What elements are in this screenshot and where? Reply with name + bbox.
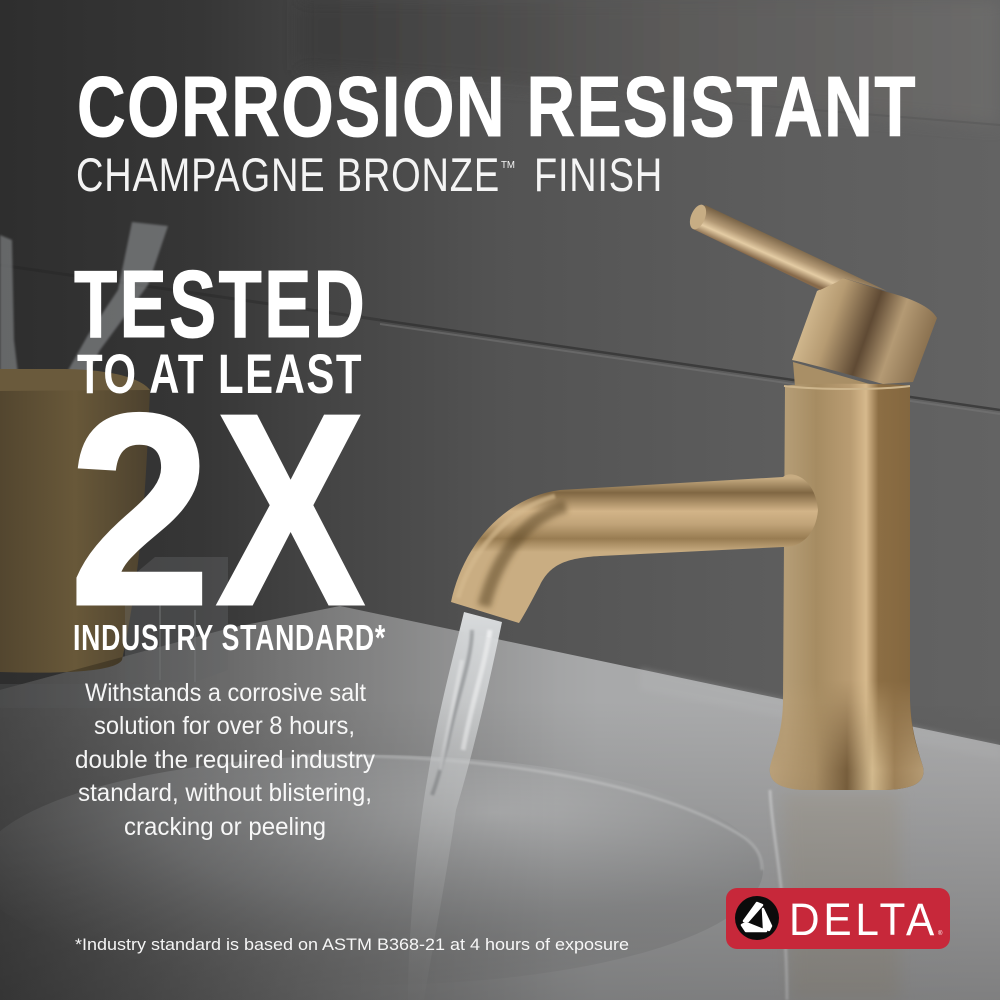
footnote: *Industry standard is based on ASTM B368-21 at 4 hours of exposure xyxy=(75,935,629,954)
cup with toothbrushes xyxy=(0,222,168,673)
spout tip highlight xyxy=(458,496,555,598)
cup rim xyxy=(0,369,150,391)
cup body xyxy=(0,390,150,673)
falling water xyxy=(408,612,502,1000)
icon: delta mark xyxy=(735,896,779,940)
toothbrush: left xyxy=(0,235,20,390)
faucet spout xyxy=(451,474,818,623)
glass cube xyxy=(0,557,228,708)
big number: 2X: 2 xyxy=(69,357,211,662)
countertop xyxy=(0,606,1000,1000)
faucet neck xyxy=(793,362,880,387)
faucet xyxy=(451,202,937,790)
lever end xyxy=(687,202,709,232)
lower shading xyxy=(0,600,1000,1000)
logo wordmark: DELTA xyxy=(789,894,938,945)
faucet flared base shading xyxy=(770,680,923,790)
faucet reflection on counter xyxy=(770,790,900,1000)
description text: standard, without blistering, xyxy=(78,779,372,807)
subtitle: TM xyxy=(501,160,515,171)
heading: industry standard: INDUSTRY STANDARD* xyxy=(73,617,386,658)
description text: Withstands a corrosive salt xyxy=(85,679,366,707)
logo: Delta xyxy=(726,888,950,949)
subtitle: FINISH xyxy=(534,148,663,201)
sink basin xyxy=(0,755,763,985)
faucet lever xyxy=(693,205,887,291)
description text: solution for over 8 hours, xyxy=(94,712,355,740)
description text: cracking or peeling xyxy=(124,813,326,841)
big number: 2X xyxy=(69,357,366,662)
toothbrush: right xyxy=(58,222,168,388)
description text: double the required industry xyxy=(75,746,375,774)
heading: tested: TESTED xyxy=(74,251,367,358)
faucet handle cap xyxy=(792,278,937,384)
spout curve shadow xyxy=(484,506,566,606)
registered mark: ® xyxy=(938,930,943,937)
description text xyxy=(75,679,375,841)
heading: to at least: TO AT LEAST xyxy=(77,342,363,405)
faucet body xyxy=(770,384,923,790)
faucet collar xyxy=(784,386,910,389)
subtitle: CHAMPAGNE BRONZE xyxy=(76,148,500,201)
big number: 2X: X xyxy=(216,357,366,662)
logo background xyxy=(726,888,950,949)
